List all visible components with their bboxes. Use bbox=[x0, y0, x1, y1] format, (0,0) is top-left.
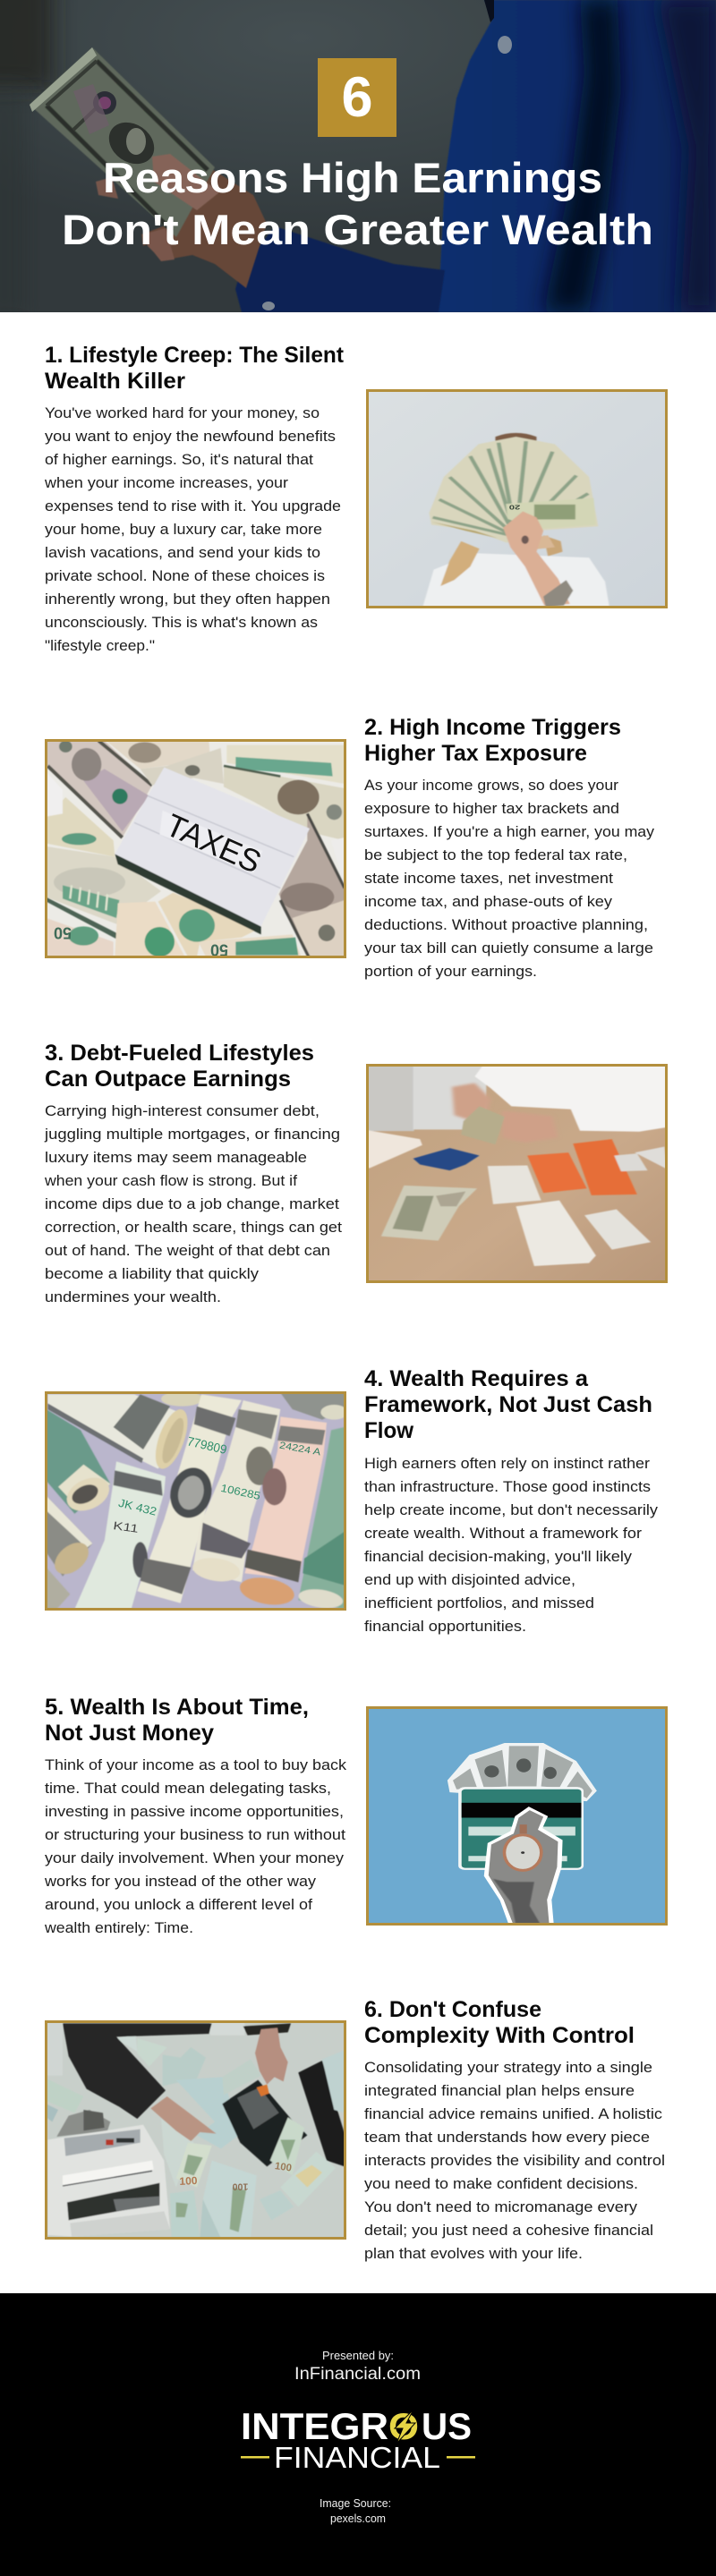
text block: section 5 body: wealth entirely: Time. bbox=[44, 1920, 193, 1936]
text block: section 3 body: undermines your wealth. bbox=[45, 1289, 221, 1305]
text block: section 1 body: you want to enjoy the newfound benefits bbox=[45, 429, 336, 445]
logo: Integrous Financial: US bbox=[422, 2405, 472, 2447]
panel: section 4 heading: Framework, Not Just Cash bbox=[364, 1392, 652, 1417]
text block: section 4 body: end up with disjointed advice, bbox=[364, 1572, 575, 1588]
image source credit bbox=[320, 2496, 391, 2525]
panel: section 3 heading: Can Outpace Earnings bbox=[45, 1067, 291, 1092]
photo: TAXES lightbox on banknotes: TAXES bbox=[160, 808, 266, 880]
photo: counting machine, calculator and scattered cash: 100 bbox=[274, 2161, 293, 2174]
text block: section 1 body: when your income increases, your bbox=[44, 475, 289, 491]
text block: section 5 body: Think of your income as a tool to buy back bbox=[45, 1757, 347, 1773]
text block: section 6 body bbox=[364, 2060, 665, 2262]
text block: section 5 body: time. That could mean delegating tasks, bbox=[45, 1781, 331, 1797]
text block: section 3 body: luxury items may seem manageable bbox=[45, 1150, 307, 1166]
panel: section 1 heading: 1. Lifestyle Creep: The Silent bbox=[45, 343, 345, 368]
text block: section 4 body: than infrastructure. Those good instincts bbox=[364, 1479, 651, 1495]
text block: section 1 body: inherently wrong, but they often happen bbox=[45, 591, 330, 608]
text block: section 4 body: financial opportunities. bbox=[364, 1619, 526, 1635]
text block: section 3 body bbox=[44, 1103, 342, 1305]
title: Don't Mean Greater Wealth bbox=[62, 206, 653, 253]
panel: section 2 heading: Higher Tax Exposure bbox=[364, 741, 587, 766]
image source credit: pexels.com bbox=[330, 2512, 386, 2525]
presented by credit: Presented by: bbox=[322, 2349, 394, 2362]
photo: counting cash and receipts at table bbox=[366, 1064, 668, 1283]
panel: section 3 heading: 3. Debt-Fueled Lifestyles bbox=[45, 1041, 314, 1066]
logo: Integrous Financial: FINANCIAL bbox=[274, 2441, 440, 2474]
text block: section 1 body: private school. None of these choices is bbox=[45, 568, 325, 584]
text block: section 6 body: plan that evolves with your life. bbox=[364, 2246, 583, 2262]
text block: section 5 body: or structuring your business to run without bbox=[45, 1827, 345, 1843]
title: Reasons High Earnings bbox=[103, 154, 602, 201]
photo: TAXES lightbox on banknotes: 50 bbox=[54, 924, 72, 942]
logo: Integrous Financial: INTEGR bbox=[241, 2405, 388, 2447]
text block: section 3 body: Carrying high-interest consumer debt, bbox=[45, 1103, 320, 1119]
text block: section 4 body: help create income, but don't necessarily bbox=[364, 1502, 659, 1518]
text block: section 1 body: "lifestyle creep." bbox=[45, 638, 155, 654]
text block: section 2 body: exposure to higher tax brackets and bbox=[364, 801, 619, 817]
photo: woman holding fan of cash bbox=[366, 389, 668, 608]
text block: section 4 body: inefficient portfolios, and missed bbox=[364, 1595, 594, 1611]
panel: section 2 heading: 2. High Income Triggers bbox=[364, 715, 621, 740]
text block: section 1 body: expenses tend to rise with it. You upgrade bbox=[45, 498, 341, 514]
badge: number 6: 6 bbox=[341, 66, 373, 129]
photo: rolled banknotes: JK 432 bbox=[117, 1497, 158, 1518]
text block: section 4 body: High earners often rely on instinct rather bbox=[364, 1456, 651, 1472]
text block: section 6 body: You don't need to micromanage every bbox=[364, 2199, 638, 2215]
text block: section 5 body: your daily involvement. When your money bbox=[45, 1850, 345, 1866]
text block: section 4 body: financial decision-making, you'll likely bbox=[364, 1549, 633, 1565]
text block: section 2 body: portion of your earnings. bbox=[364, 964, 537, 980]
text block: section 2 body: surtaxes. If you're a high earner, you may bbox=[364, 824, 655, 840]
text block: section 1 body: unconsciously. This is what's known as bbox=[45, 615, 318, 631]
panel: section 4 heading: Flow bbox=[364, 1418, 414, 1443]
text block: section 6 body: integrated financial plan helps ensure bbox=[364, 2083, 635, 2099]
presented by credit: InFinancial.com bbox=[294, 2365, 421, 2384]
text block: section 3 body: juggling multiple mortgages, or financing bbox=[44, 1126, 340, 1143]
text block: section 3 body: income dips due to a job change, market bbox=[45, 1196, 339, 1212]
photo: hand with stopwatch over credit card and cash bbox=[366, 1706, 668, 1926]
photo: TAXES lightbox on banknotes: 50 bbox=[210, 940, 228, 958]
panel: section 2 heading bbox=[364, 715, 621, 766]
badge: number 6 bbox=[318, 58, 396, 137]
footer panel bbox=[0, 2293, 716, 2576]
text block: section 2 body: income tax, and phase-outs of key bbox=[364, 894, 613, 910]
text block: section 2 body: As your income grows, so does your bbox=[364, 778, 619, 794]
text block: section 1 body: You've worked hard for your money, so bbox=[45, 405, 320, 421]
panel: section 1 heading: Wealth Killer bbox=[45, 369, 185, 394]
text block: section 3 body: when your cash flow is strong. But if bbox=[44, 1173, 297, 1189]
text block: section 6 body: team that understands how every piece bbox=[364, 2130, 650, 2146]
text block: section 3 body: become a liability that quickly bbox=[45, 1266, 260, 1282]
photo: rolled banknotes: 779809 bbox=[186, 1433, 228, 1457]
text block: section 1 body: lavish vacations, and send your kids to bbox=[45, 545, 320, 561]
photo: woman holding fan of cash: 20 bbox=[509, 503, 520, 511]
photo: rolled banknotes: K11 bbox=[113, 1519, 140, 1535]
text block: section 1 body bbox=[44, 405, 341, 654]
text block: section 6 body: detail; you just need a cohesive financial bbox=[364, 2223, 653, 2239]
panel: section 5 heading: 5. Wealth Is About Time, bbox=[45, 1695, 309, 1720]
text block: section 5 body: investing in passive income opportunities, bbox=[45, 1804, 344, 1820]
panel: section 4 heading bbox=[364, 1366, 652, 1443]
text block: section 2 body: your tax bill can quietly consume a large bbox=[364, 940, 653, 956]
text block: section 6 body: you need to make confident decisions. bbox=[364, 2176, 638, 2192]
panel: section 4 heading: 4. Wealth Requires a bbox=[364, 1366, 589, 1391]
panel: section 5 heading: Not Just Money bbox=[45, 1721, 214, 1746]
panel: section 6 heading: 6. Don't Confuse bbox=[364, 1997, 541, 2022]
photo: rolled banknotes: 24224 A bbox=[278, 1440, 322, 1458]
panel: section 6 heading: Complexity With Control bbox=[364, 2023, 635, 2048]
photo: counting machine, calculator and scattered cash: 100 bbox=[179, 2174, 198, 2188]
photo: counting machine, calculator and scattered cash bbox=[45, 2020, 346, 2240]
text block: section 6 body: interacts provides the visibility and control bbox=[364, 2153, 665, 2169]
text block: section 3 body: correction, or health scare, things can get bbox=[45, 1220, 342, 1236]
panel: section 6 heading bbox=[364, 1997, 635, 2048]
photo: rolled banknotes bbox=[45, 1391, 347, 1611]
text block: section 3 body: out of hand. The weight of that debt can bbox=[45, 1243, 330, 1259]
panel: section 1 heading bbox=[45, 343, 345, 394]
text block: section 5 body: around, you unlock a different level of bbox=[45, 1897, 312, 1913]
photo: TAXES lightbox on banknotes bbox=[45, 739, 346, 958]
photo: counting machine, calculator and scattered cash: 100 bbox=[232, 2181, 248, 2192]
text block: section 2 body: state income taxes, net investment bbox=[364, 871, 613, 887]
presented by credit bbox=[294, 2349, 421, 2384]
text block: section 1 body: of higher earnings. So, it's natural that bbox=[45, 452, 313, 468]
logo: Integrous Financial bbox=[241, 2405, 475, 2474]
panel: section 5 heading bbox=[45, 1695, 309, 1746]
header banner bbox=[0, 0, 716, 322]
text block: section 2 body bbox=[364, 778, 655, 980]
text block: section 5 body: works for you instead of the other way bbox=[44, 1874, 317, 1890]
text block: section 4 body bbox=[364, 1456, 659, 1635]
text block: section 4 body: create wealth. Without a framework for bbox=[364, 1526, 643, 1542]
text block: section 2 body: be subject to the top federal tax rate, bbox=[364, 847, 627, 863]
text block: section 1 body: your home, buy a luxury car, take more bbox=[45, 522, 322, 538]
text block: section 5 body bbox=[44, 1757, 347, 1936]
image source credit: Image Source: bbox=[320, 2496, 391, 2510]
text block: section 2 body: deductions. Without proactive planning, bbox=[364, 917, 648, 933]
logo: Integrous Financial: O bbox=[388, 2405, 419, 2447]
text block: section 6 body: financial advice remains unified. A holistic bbox=[364, 2106, 662, 2122]
photo: rolled banknotes: 106285 bbox=[219, 1482, 262, 1502]
panel: section 3 heading bbox=[45, 1041, 314, 1092]
title bbox=[62, 154, 653, 253]
text block: section 6 body: Consolidating your strategy into a single bbox=[364, 2060, 652, 2076]
